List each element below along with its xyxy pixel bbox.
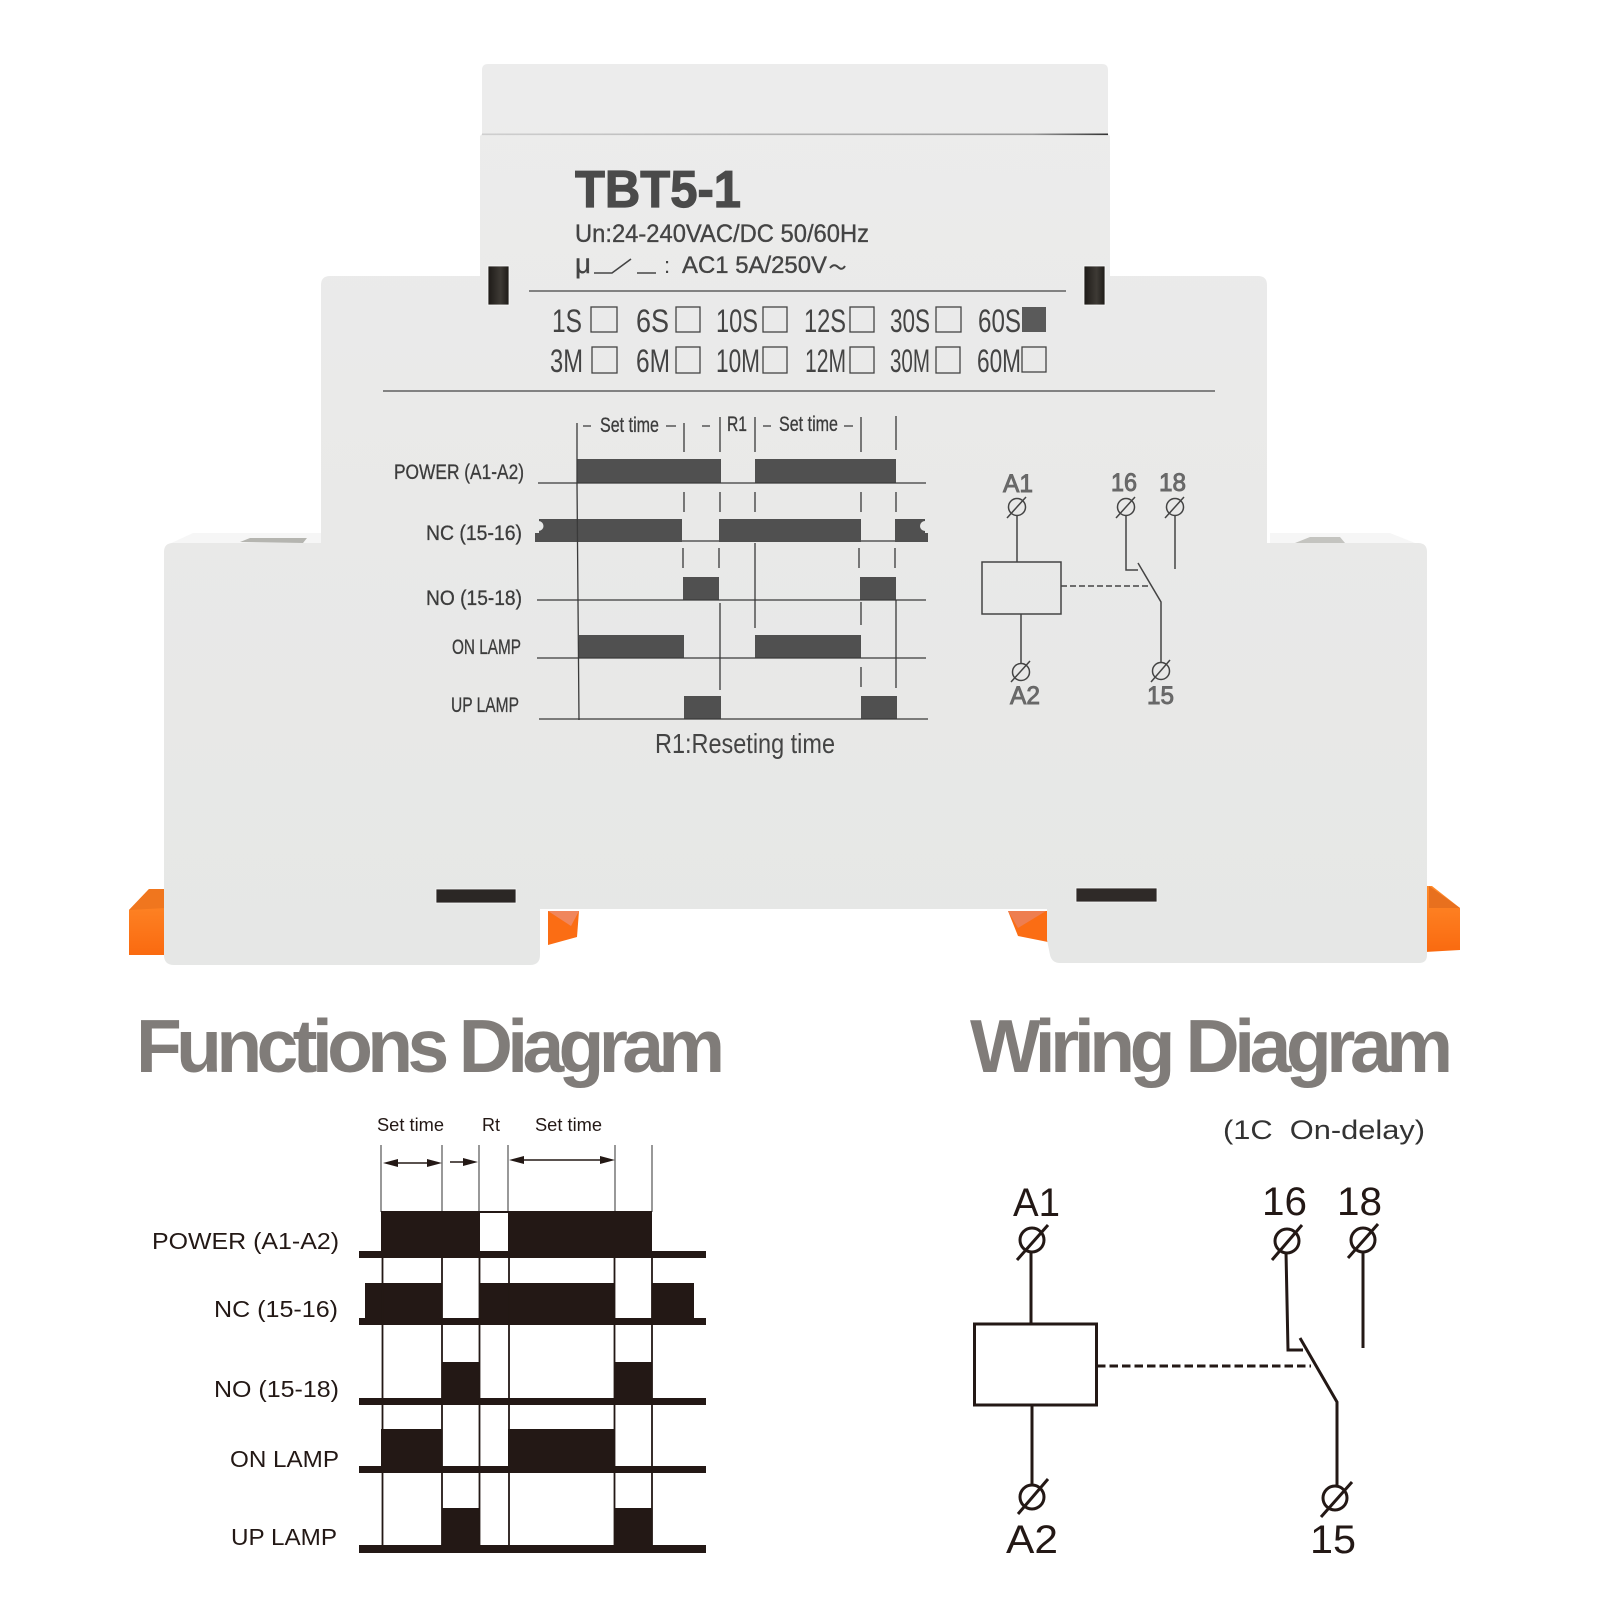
contact rating line bbox=[575, 248, 845, 279]
cover groove bbox=[482, 134, 1108, 135]
time range selector grid: 30S bbox=[890, 303, 930, 339]
terminal symbols bbox=[1017, 1224, 1378, 1517]
wiring subtitle: (1C On-delay) bbox=[1223, 1115, 1425, 1145]
time range selector grid: 60M bbox=[977, 343, 1021, 379]
terminal labels: A1 bbox=[1003, 470, 1033, 498]
terminal labels: 16 bbox=[1262, 1180, 1307, 1224]
conductors bbox=[1031, 1252, 1363, 1485]
terminal labels: 16 bbox=[1111, 469, 1137, 497]
orange DIN clips bbox=[129, 886, 1460, 955]
panel: relay device photo bbox=[129, 64, 1460, 965]
contact rating line: μ bbox=[575, 248, 591, 279]
divider rules bbox=[383, 291, 1215, 391]
timing bars bbox=[535, 459, 928, 719]
terminal tops bbox=[167, 533, 1420, 545]
time range selector grid: 1S bbox=[552, 303, 582, 339]
terminal labels: 15 bbox=[1147, 682, 1174, 710]
row labels bbox=[152, 1228, 339, 1550]
vertical guides bbox=[382, 1258, 652, 1546]
terminal labels bbox=[1003, 469, 1186, 710]
voltage line: Un:24-240VAC/DC 50/60Hz bbox=[575, 220, 869, 248]
reset time note: R1:Reseting time bbox=[655, 728, 835, 759]
relay housing body bbox=[164, 64, 1427, 965]
time range selector grid: 12M bbox=[805, 343, 846, 379]
time range selector grid: 6M bbox=[636, 343, 670, 379]
chart lines bbox=[537, 416, 928, 720]
terminal labels bbox=[1006, 1180, 1382, 1562]
terminal labels: 15 bbox=[1310, 1518, 1356, 1562]
time range selector grid: 6S bbox=[636, 303, 669, 339]
device wiring schematic bbox=[982, 469, 1186, 710]
heading: Functions Diagram: Functions Diagram bbox=[136, 1004, 725, 1088]
time range selector grid bbox=[550, 303, 1046, 379]
time span labels: Set time bbox=[535, 1115, 602, 1135]
coil and contact lines bbox=[982, 497, 1184, 682]
terminal labels: 18 bbox=[1337, 1180, 1382, 1224]
dashed coupling line bbox=[1097, 1364, 1311, 1368]
chart labels bbox=[394, 413, 838, 717]
row labels: ON LAMP bbox=[230, 1446, 339, 1472]
chart labels: R1 bbox=[727, 413, 747, 436]
chart labels: NC (15-16) bbox=[426, 522, 522, 545]
row labels: UP LAMP bbox=[231, 1524, 337, 1550]
terminal labels: A2 bbox=[1006, 1518, 1058, 1562]
row labels: NO (15-18) bbox=[214, 1376, 339, 1402]
terminal labels: A2 bbox=[1010, 682, 1040, 710]
heading: Wiring Diagram: Wiring Diagram bbox=[970, 1004, 1453, 1088]
time range selector grid: 60S bbox=[978, 303, 1021, 339]
row labels: POWER (A1-A2) bbox=[152, 1228, 339, 1254]
chart labels: NO (15-18) bbox=[426, 587, 522, 610]
chart: functions timing diagram bbox=[152, 1115, 706, 1553]
terminal labels: 18 bbox=[1159, 469, 1186, 497]
signal bars bbox=[365, 1211, 694, 1546]
contact rating line: : bbox=[664, 253, 670, 278]
time range selector grid: 10S bbox=[716, 303, 758, 339]
chart labels: Set time bbox=[779, 413, 838, 436]
time range selector grid: 12S bbox=[804, 303, 846, 339]
chart: wiring schematic bbox=[974, 1180, 1382, 1562]
span arrows bbox=[381, 1145, 652, 1212]
chart labels: POWER (A1-A2) bbox=[394, 461, 524, 484]
terminal labels: A1 bbox=[1013, 1181, 1060, 1225]
chart labels: UP LAMP bbox=[451, 694, 519, 717]
time range selector grid: 30M bbox=[890, 343, 930, 379]
time span labels bbox=[377, 1115, 602, 1135]
chart labels: ON LAMP bbox=[452, 636, 521, 659]
bottom slots bbox=[436, 888, 1157, 903]
row labels: NC (15-16) bbox=[214, 1296, 338, 1322]
device timing chart bbox=[394, 413, 930, 759]
side slots bbox=[488, 266, 1105, 305]
time range selector grid: 3M bbox=[550, 343, 583, 379]
time span labels: Set time bbox=[377, 1115, 444, 1135]
contact rating line: AC1 5A/250V bbox=[682, 252, 827, 279]
time span labels: Rt bbox=[482, 1115, 500, 1135]
baselines bbox=[359, 1251, 706, 1553]
time range selector grid: 10M bbox=[716, 343, 760, 379]
NC bar notches bbox=[533, 518, 930, 533]
coil box bbox=[974, 1324, 1096, 1405]
device model title: TBT5-1 bbox=[575, 161, 741, 219]
chart labels: Set time bbox=[600, 414, 659, 437]
